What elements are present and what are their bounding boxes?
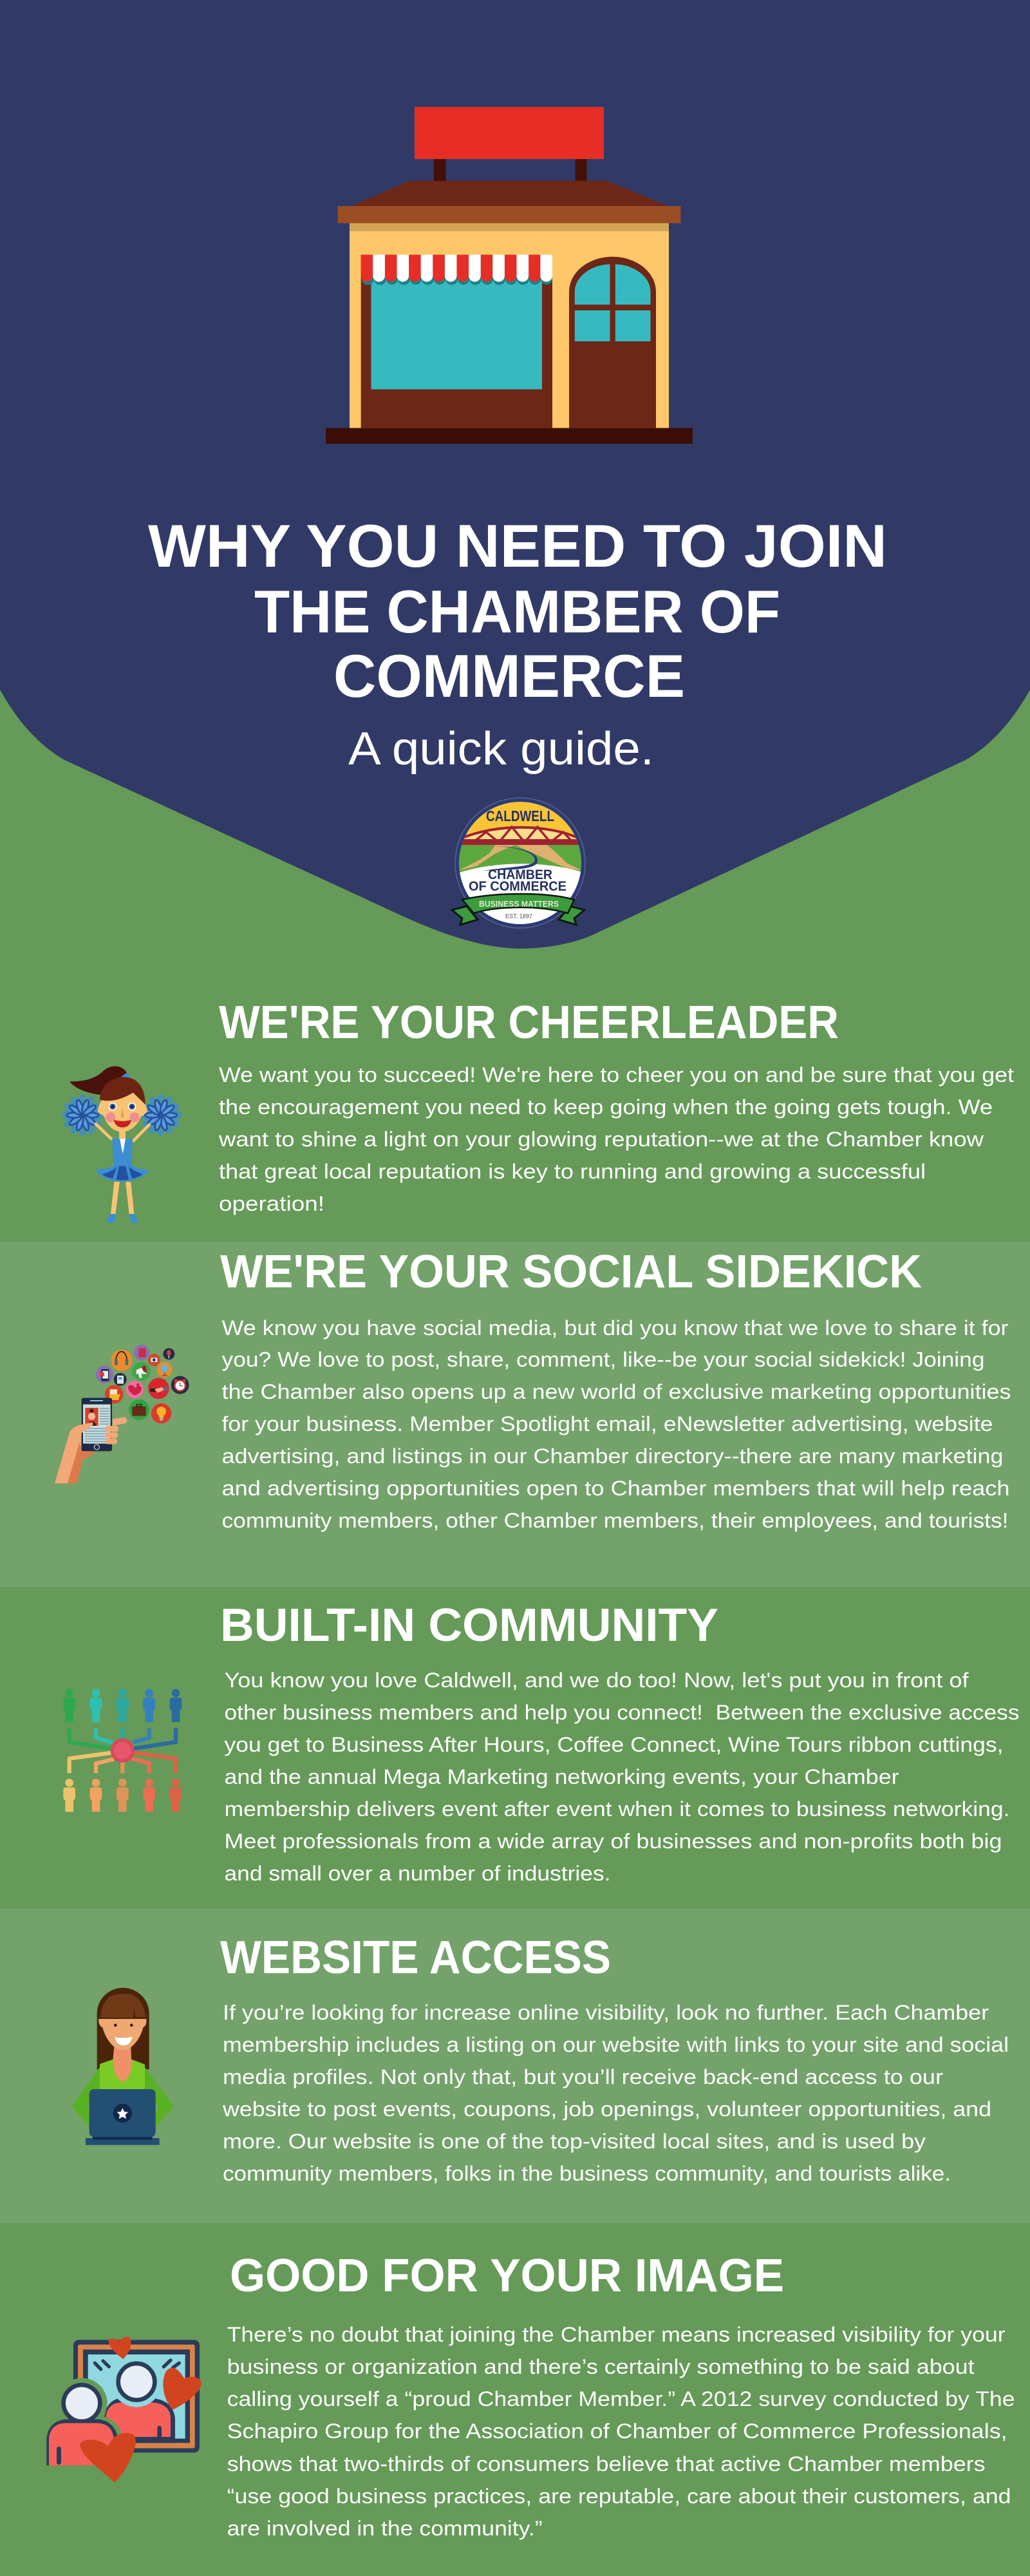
body text: shows that two-thirds of consumers believe that active Chamber members [227, 2452, 986, 2476]
body text: There’s no doubt that joining the Chamber means increased visibility for your [227, 2323, 1006, 2346]
logo: Caldwell Chamber of Commerce: OF COMMERCE [469, 879, 566, 894]
body text: the Chamber also opens up a new world of exclusive marketing opportunities [221, 1380, 1011, 1403]
body text: are involved in the community.” [227, 2517, 543, 2540]
body text: community members, folks in the business community, and tourists alike. [223, 2162, 951, 2185]
body text: membership includes a listing on our website with links to your site and social [223, 2033, 1009, 2056]
title: WHY YOU NEED TO JOIN [148, 512, 887, 580]
body text: media profiles. Not only that, but you’ll receive back-end access to our [223, 2065, 943, 2088]
header banner [0, 0, 1030, 949]
icon: hand holding phone with social icons [55, 1345, 189, 1483]
icon: cheerleader [63, 1066, 181, 1223]
logo: Caldwell Chamber of Commerce [451, 798, 592, 928]
body text: that great local reputation is key to running and growing a successful [219, 1160, 926, 1183]
panel background [0, 1242, 1030, 1587]
body text: If you’re looking for increase online visibility, look no further. Each Chamber [223, 2001, 989, 2024]
heading: WE'RE YOUR CHEERLEADER [219, 997, 839, 1048]
body text [222, 2001, 1009, 2185]
body text [218, 1063, 1014, 1215]
body text: We know you have social media, but did you know that we love to share it for [221, 1316, 1009, 1340]
panel: built-in community [63, 1600, 1020, 1885]
icon: storefront building [326, 107, 693, 444]
logo: Caldwell Chamber of Commerce: BUSINESS MATTERS [479, 899, 559, 909]
body text: membership delivers event after event when it comes to business networking. [224, 1797, 1009, 1821]
body text: for your business. Member Spotlight email, eNewsletter advertising, website [221, 1412, 993, 1435]
heading: BUILT-IN COMMUNITY [220, 1600, 718, 1651]
body text: the encouragement you need to keep going when the going gets tough. We [219, 1095, 993, 1119]
body text: Schapiro Group for the Association of Chamber of Commerce Professionals, [227, 2420, 1007, 2443]
logo: Caldwell Chamber of Commerce: CHAMBER [488, 867, 552, 882]
body text: you get to Business After Hours, Coffee Connect, Wine Tours ribbon cuttings, [224, 1733, 1003, 1756]
body text: business or organization and there’s certainly something to be said about [227, 2355, 975, 2378]
icon: woman with laptop [72, 1988, 174, 2145]
body text: advertising, and listings in our Chamber directory--there are many marketing [221, 1444, 1003, 1468]
body text: “use good business practices, are reputable, care about their customers, and [227, 2485, 1011, 2508]
panel: good for your image [39, 2250, 1015, 2540]
body text: operation! [219, 1192, 324, 1215]
body text: You know you love Caldwell, and we do too! Now, let's put you in front of [224, 1669, 969, 1692]
logo: Caldwell Chamber of Commerce: EST. 1897 [505, 913, 532, 920]
title [148, 512, 887, 710]
body text: calling yourself a “proud Chamber Member.” A 2012 survey conducted by The [227, 2387, 1015, 2410]
heading: WEBSITE ACCESS [220, 1932, 611, 1984]
icon: people network [63, 1689, 182, 1812]
heading: GOOD FOR YOUR IMAGE [230, 2250, 784, 2302]
body text [227, 2323, 1015, 2540]
body text [224, 1669, 1020, 1885]
logo: Caldwell Chamber of Commerce: CALDWELL [486, 808, 554, 824]
title: COMMERCE [333, 642, 685, 710]
panel background [0, 1909, 1030, 2223]
subtitle: A quick guide. [348, 723, 654, 775]
body text [221, 1316, 1011, 1532]
body text: and small over a number of industries. [224, 1862, 610, 1885]
panel: we're your cheerleader [63, 997, 1014, 1223]
body text: and advertising opportunities open to Chamber members that will help reach [221, 1477, 1009, 1500]
body text: and the annual Mega Marketing networking events, your Chamber [224, 1765, 899, 1788]
icon: people in picture frame with hearts [39, 2336, 201, 2483]
title: THE CHAMBER OF [254, 578, 780, 645]
panel: website access [0, 1909, 1030, 2223]
body text: community members, other Chamber members, their employees, and tourists! [221, 1509, 1008, 1532]
body text: want to shine a light on your glowing reputation--we at the Chamber know [218, 1128, 984, 1151]
heading: WE'RE YOUR SOCIAL SIDEKICK [220, 1246, 922, 1298]
body text: website to post events, coupons, job openings, volunteer opportunities, and [222, 2098, 991, 2121]
body text: Meet professionals from a wide array of businesses and non-profits both big [224, 1830, 1002, 1853]
body text: you? We love to post, share, comment, like--be your social sidekick! Joining [221, 1348, 985, 1371]
body text: more. Our website is one of the top-visited local sites, and is used by [223, 2130, 926, 2153]
body text: other business members and help you connect! Between the exclusive access [224, 1701, 1020, 1724]
panel: we're your social sidekick [0, 1242, 1030, 1587]
body text: We want you to succeed! We're here to cheer you on and be sure that you get [219, 1063, 1014, 1086]
